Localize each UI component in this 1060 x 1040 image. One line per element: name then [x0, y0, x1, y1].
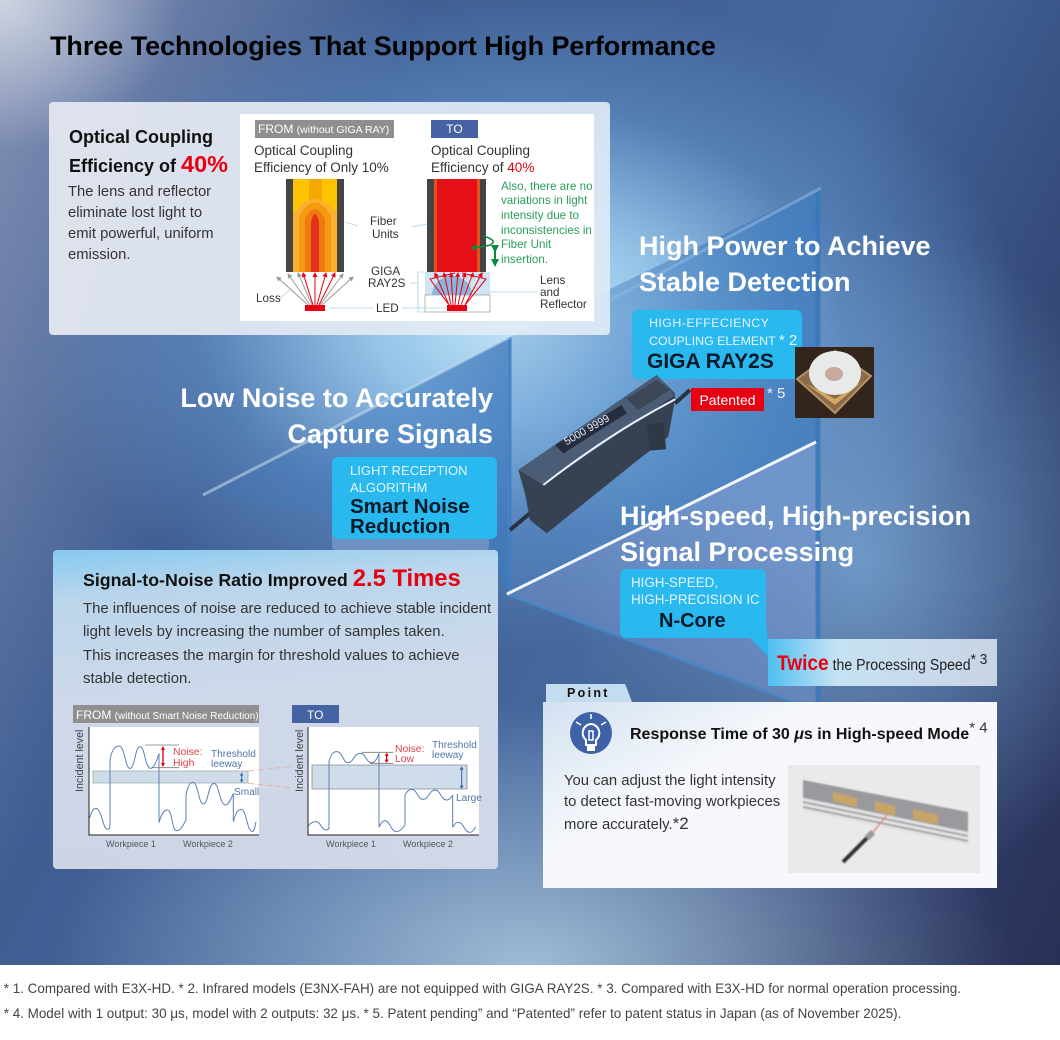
- badge: patented: [691, 388, 764, 411]
- heading: ratio: Signal-to-Noise Ratio Improved 2.5 Times: [83, 565, 461, 592]
- text: from efficiency: Efficiency of Only 10%: [254, 160, 389, 174]
- tag name: Smart Noise: [350, 495, 470, 518]
- chart: from/to noise: Small: [234, 787, 259, 798]
- diagram: from/to fiber units: Also, there are no: [501, 180, 593, 193]
- tag name: Reduction: [350, 515, 450, 538]
- text: lens description: emit powerful, uniform: [68, 226, 214, 242]
- diagram: from/to fiber units: intensity due to: [501, 209, 579, 222]
- text: lens description: [68, 184, 214, 263]
- tag: GIGA RAY2S: [632, 310, 802, 379]
- heading: high power: Stable Detection: [639, 267, 851, 297]
- panel: point: [543, 702, 997, 888]
- text: lens description: emission.: [68, 247, 130, 263]
- text: adjust light: more accurately.*2: [564, 814, 689, 833]
- tag: N-Core: [620, 569, 766, 638]
- photo: workpieces with fiber: [788, 765, 980, 873]
- tag name: GIGA RAY2S: [647, 350, 774, 373]
- heading: efficiency 40%: Optical Coupling: [69, 127, 213, 147]
- chart: from/to noise: TO: [307, 708, 323, 722]
- chart: from/to noise: Threshold: [432, 740, 477, 751]
- banner: twice speed: [768, 639, 997, 686]
- diagram: from/to fiber units: variations in light: [501, 194, 588, 207]
- tag label: ALGORITHM: [350, 480, 427, 495]
- diagram: from/to fiber units: Fiber: [370, 215, 397, 228]
- diagram: from/to fiber units: RAY2S: [368, 277, 406, 290]
- panel: signal to noise: [53, 550, 498, 869]
- tab: point: [546, 684, 632, 702]
- label: TO: [431, 120, 478, 138]
- tag label: [350, 463, 468, 495]
- text: lens description: eliminate lost light to: [68, 205, 202, 221]
- tag name: [350, 495, 470, 538]
- text: to efficiency: [431, 143, 534, 175]
- photo: LED element: [795, 347, 874, 418]
- footnotes: * 4. Model with 1 output: 30 μs, model with 2 outputs: 32 μs. * 5. Patent pending” and “Patented” refer to patent status in Japan (as of November 2025).: [4, 1006, 901, 1021]
- heading: low noise: Low Noise to Accurately: [180, 383, 493, 413]
- tag label: COUPLING ELEMENT * 2: [649, 332, 797, 349]
- chart: from/to noise: Noise:: [173, 747, 202, 758]
- diagram: from/to fiber units: GIGA: [371, 265, 400, 278]
- footnotes: [4, 981, 961, 1021]
- diagram: from/to fiber units: inconsistencies in: [501, 224, 592, 237]
- banner: twice speed: Twice the Processing Speed* 3: [777, 651, 987, 675]
- tag name: N-Core: [659, 610, 726, 632]
- chart: from/to noise: Noise:: [395, 744, 424, 755]
- text: to efficiency: Efficiency of 40%: [431, 160, 534, 174]
- text: from efficiency: [254, 143, 389, 175]
- diagram: from/to fiber units: and: [540, 286, 560, 299]
- diagram: from/to fiber units: Reflector: [540, 298, 587, 311]
- tag label: HIGH-PRECISION IC: [631, 592, 760, 607]
- text: noise description: stable detection.: [83, 671, 191, 687]
- chart: from/to noise: Workpiece 1: [326, 839, 376, 849]
- heading: response time: Response Time of 30 μs in High-speed Mode* 4: [630, 720, 988, 743]
- chart: from/to noise: leeway: [211, 759, 243, 770]
- footnotes: * 1. Compared with E3X-HD. * 2. Infrared models (E3NX-FAH) are not equipped with GIGA RAY2S. * 3. Compared with E3X-HD for normal operation processing.: [4, 981, 961, 996]
- text: adjust light: [564, 773, 780, 833]
- heading: efficiency 40%: Efficiency of 40%: [69, 151, 228, 177]
- diagram: from/to fiber units: Units: [372, 228, 399, 241]
- label: TO: TO: [446, 122, 463, 136]
- diagram: from/to fiber units: Lens: [540, 274, 566, 287]
- diagram: from/to fiber units: [240, 114, 594, 321]
- heading: low noise: [180, 383, 493, 449]
- text: noise description: [83, 601, 492, 687]
- text: noise description: light levels by increasing the number of samples taken.: [83, 624, 445, 640]
- tag label: HIGH-SPEED,: [631, 575, 718, 590]
- chart: from/to noise: Workpiece 2: [403, 839, 453, 849]
- heading: high speed: [620, 501, 971, 567]
- text: noise description: This increases the margin for threshold values to achieve: [83, 648, 460, 664]
- chart: from/to noise: Threshold: [211, 749, 256, 760]
- chart: from/to noise: leeway: [432, 750, 464, 761]
- product: amplifier: 5000 9999: [562, 412, 612, 448]
- chart: from/to noise: Workpiece 1: [106, 839, 156, 849]
- note: *5: * 5: [767, 385, 785, 402]
- chart: from/to noise: FROM (without Smart Noise Reduction): [76, 708, 259, 722]
- strip under smart noise tag: [332, 530, 489, 550]
- panel: optical coupling: [49, 102, 610, 335]
- chart: from/to noise: Incident level: [74, 730, 86, 792]
- label: FROM: FROM (without GIGA RAY): [258, 122, 389, 136]
- text: adjust light: You can adjust the light intensity: [564, 773, 776, 789]
- chart: from/to noise: Large: [456, 793, 482, 804]
- text: from efficiency: Optical Coupling: [254, 143, 353, 158]
- text: adjust light: to detect fast-moving workpieces: [564, 794, 780, 810]
- tag: smart noise reduction: [332, 457, 497, 539]
- text: to efficiency: Optical Coupling: [431, 143, 530, 158]
- chart: from/to noise: Workpiece 2: [183, 839, 233, 849]
- text: lens description: The lens and reflector: [68, 184, 211, 200]
- heading: high speed: Signal Processing: [620, 537, 854, 567]
- text: noise description: The influences of noise are reduced to achieve stable incident: [83, 601, 491, 617]
- heading: high speed: High-speed, High-precision: [620, 501, 971, 531]
- chart: from/to noise: Incident level: [294, 730, 306, 792]
- heading: high power: High Power to Achieve: [639, 231, 931, 261]
- heading: low noise: Capture Signals: [287, 419, 493, 449]
- diagram: from/to fiber units: Loss: [256, 292, 281, 305]
- diagram: from/to fiber units: Fiber Unit: [501, 238, 552, 251]
- diagram: from/to fiber units: LED: [376, 302, 399, 315]
- tag label: [631, 575, 760, 607]
- chart: from/to noise: [73, 705, 482, 849]
- tag label: HIGH-EFFECIENCY: [649, 316, 769, 330]
- chart: from/to noise: Low: [395, 754, 415, 765]
- icon: light bulb: [570, 712, 612, 754]
- title: Three Technologies That Support High Performance: [50, 31, 716, 61]
- tab: point: Point: [567, 686, 610, 700]
- tag label: LIGHT RECEPTION: [350, 463, 468, 478]
- chart: from/to noise: High: [173, 758, 195, 769]
- badge: patented: Patented: [699, 392, 756, 408]
- tag label: [649, 316, 797, 349]
- diagram: from/to fiber units: insertion.: [501, 253, 548, 266]
- heading: efficiency 40%: [69, 127, 228, 177]
- heading: high power: [639, 231, 931, 297]
